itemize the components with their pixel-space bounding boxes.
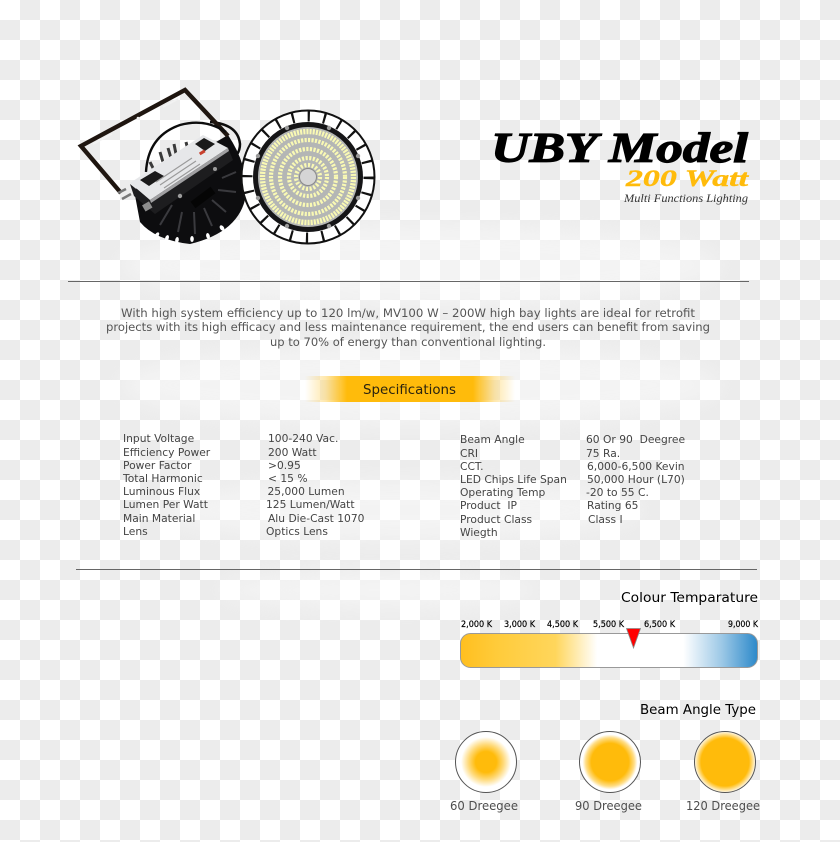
driver labels [140, 171, 164, 186]
beam: 120 degree: 120 Dreegee [686, 799, 760, 813]
specifications: right column: 50,000 Hour (L70) [587, 473, 685, 486]
specifications: left column: < 15 % [268, 472, 308, 485]
outer guard ring [242, 110, 374, 244]
specifications: left column: Power Factor [123, 459, 192, 472]
beam: 90 degree [575, 732, 642, 813]
description paragraph: up to 70% of energy than conventional lighting. [270, 335, 546, 349]
divider [76, 569, 757, 570]
specifications: right column: CCT. [460, 460, 484, 473]
gradient bar [460, 634, 758, 668]
red marker [626, 628, 640, 648]
beam angle heading: Beam Angle Type [640, 702, 756, 718]
centre disc [300, 168, 316, 186]
specifications: left column: 100-240 Vac. [268, 432, 338, 445]
specifications: right column [460, 433, 685, 539]
colour temperature heading: Colour Temparature [621, 590, 758, 606]
specifications: right column: 6,000-6,500 Kevin [587, 460, 685, 473]
specifications: right column: Product Class [460, 513, 533, 526]
specifications: right column: Wiegth [460, 526, 498, 539]
model name: UBY Model [491, 126, 748, 172]
specifications: left column: 200 Watt [268, 446, 317, 459]
specifications: left column: Alu Die-Cast 1070 [268, 512, 365, 525]
title [491, 126, 749, 205]
tick labels: 9,000 K [728, 620, 758, 630]
specifications: left column [122, 432, 365, 538]
tick labels: 6,500 K [644, 620, 675, 630]
LED rings [262, 132, 354, 222]
specifications: right column: Beam Angle [460, 433, 525, 446]
specifications: left column: Main Material [123, 512, 195, 525]
tick labels: 3,000 K [504, 620, 535, 630]
tick labels [461, 620, 758, 630]
specifications heading banner: Specifications [363, 382, 456, 398]
beam: 120 degree [686, 732, 760, 813]
specifications: left column: Lens [123, 525, 148, 538]
specifications: right column: CRI [460, 447, 478, 460]
tick labels: 2,000 K [461, 620, 492, 630]
front cable arc [146, 123, 226, 172]
driver box top [130, 135, 228, 200]
description paragraph [106, 306, 710, 349]
description paragraph: With high system efficiency up to 120 lm/w, MV100 W – 200W high bay lights are ideal for retrofit [121, 306, 695, 320]
tick labels: 5,500 K [593, 620, 624, 630]
heatsink [134, 135, 246, 244]
fins above driver [150, 142, 188, 170]
tagline: Multi Functions Lighting [623, 191, 748, 205]
cable behind [210, 122, 240, 162]
specifications: right column: -20 to 55 C. [586, 486, 649, 499]
faint watermark [120, 225, 720, 608]
mounting bracket [81, 90, 228, 193]
specifications: left column: >0.95 [268, 459, 301, 472]
specifications heading banner [305, 376, 515, 402]
specifications: left column: Luminous Flux [123, 485, 200, 498]
specifications: left column: Input Voltage [123, 432, 194, 445]
housing [253, 122, 363, 232]
specifications: left column: Total Harmonic [122, 472, 203, 485]
product photo: front view of lamp [242, 110, 374, 244]
beam: 60 degree [450, 732, 518, 813]
divider [68, 281, 749, 282]
specifications: right column: LED Chips Life Span [460, 473, 567, 486]
beam: 60 degree: 60 Dreegee [450, 799, 518, 813]
description paragraph: projects with its high efficacy and less maintenance requirement, the end users can benefit from saving [106, 320, 710, 334]
driver side wall [130, 148, 233, 214]
wattage: 200 Watt [625, 166, 749, 191]
specifications: right column: 60 Or 90 Deegree [586, 433, 685, 446]
specifications: right column: Rating 65 [587, 499, 638, 512]
specifications: right column: 75 Ra. [586, 447, 620, 460]
product photo: rear view of lamp [81, 90, 246, 244]
specifications: left column: 125 Lumen/Watt [266, 498, 355, 511]
specifications: right column: Class I [588, 513, 623, 526]
beam: 90 degree: 90 Dreegee [575, 799, 642, 813]
connector [193, 190, 213, 205]
tick labels: 4,500 K [547, 620, 578, 630]
specifications: left column: 25,000 Lumen [268, 485, 345, 498]
bolts [178, 194, 182, 198]
specifications: right column: Product IP [460, 499, 518, 512]
specifications: left column: Optics Lens [266, 525, 328, 538]
LED plate [258, 127, 358, 227]
colour temperature scale [460, 620, 758, 668]
specifications: left column: Efficiency Power [123, 446, 211, 459]
specifications: left column: Lumen Per Watt [123, 498, 208, 511]
specifications: right column: Operating Temp [460, 486, 546, 499]
